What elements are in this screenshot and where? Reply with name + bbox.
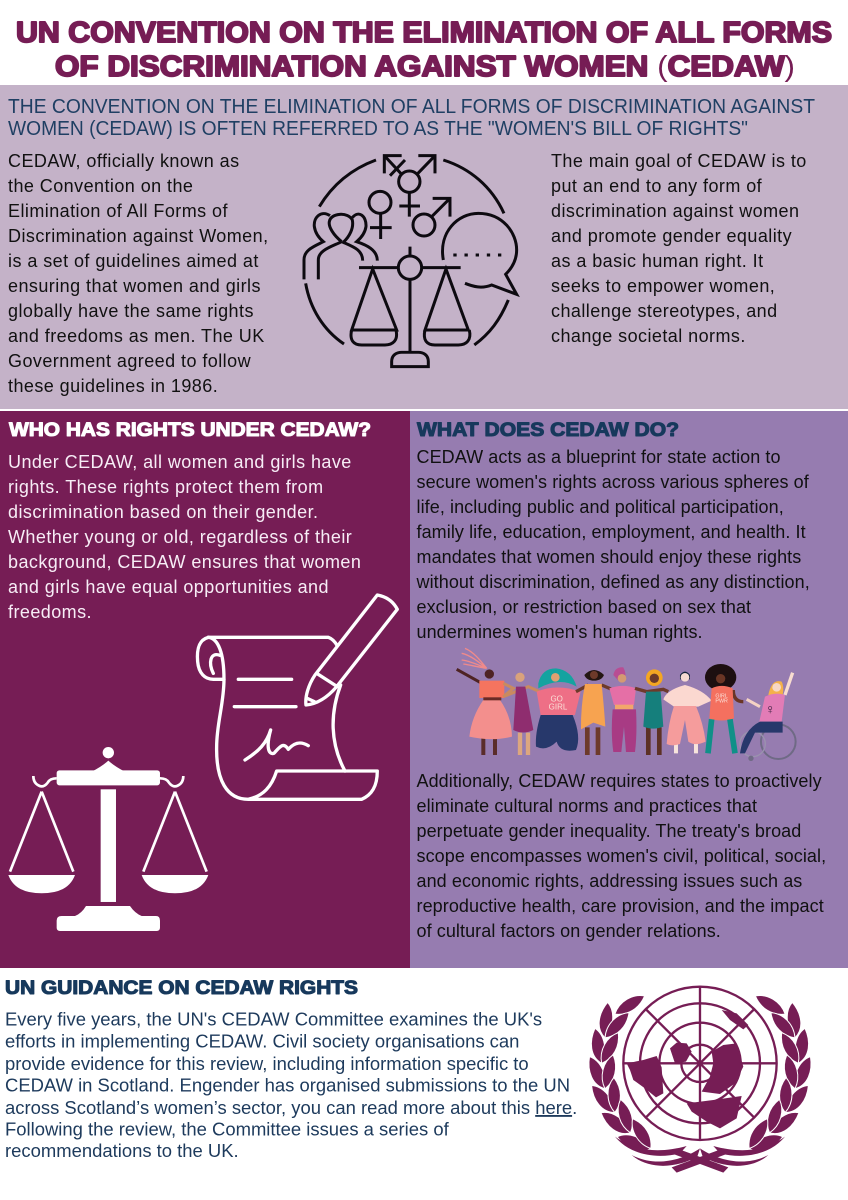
text block: background, CEDAW ensures that women	[8, 552, 361, 572]
panel: what does CEDAW do	[410, 411, 848, 968]
text block: what CEDAW is: is a set of guidelines aimed at	[8, 251, 259, 271]
subheading	[8, 96, 815, 140]
text block: discrimination based on their gender.	[8, 502, 318, 522]
heading: WHAT DOES CEDAW DO?	[417, 419, 679, 441]
illustration: diverse women linking arms: PWR	[715, 698, 728, 704]
text block: across Scotland’s women’s sector, you can read more about this here.	[5, 1097, 577, 1118]
text block: what CEDAW is: Government agreed to follow	[8, 351, 252, 371]
illustration: diverse women linking arms: GIRL	[549, 702, 568, 711]
text block: cultural norms	[416, 771, 826, 941]
text block: blueprint: CEDAW acts as a blueprint for state action to	[416, 447, 781, 467]
text block	[8, 452, 361, 622]
text block: what CEDAW is: these guidelines in 1986.	[8, 376, 218, 396]
text block: what CEDAW is: Elimination of All Forms of	[8, 201, 229, 221]
text block: cultural norms: Additionally, CEDAW requires states to proactively	[416, 771, 822, 791]
text block: provide evidence for this review, including information specific to	[5, 1053, 529, 1074]
text block: blueprint: mandates that women should enjoy these rights	[416, 547, 801, 567]
text block: Under CEDAW, all women and girls have	[8, 452, 352, 472]
text block: recommendations to the UK.	[5, 1140, 239, 1161]
text block: freedoms.	[8, 602, 92, 622]
title: OF DISCRIMINATION AGAINST WOMEN (CEDAW )	[55, 51, 795, 83]
icon: balance scale	[8, 747, 208, 931]
heading: UN GUIDANCE ON CEDAW RIGHTS	[5, 977, 358, 999]
text block: Every five years, the UN's CEDAW Committee examines the UK's	[5, 1009, 542, 1030]
heading: WHO HAS RIGHTS UNDER CEDAW?	[9, 419, 371, 441]
text block: what CEDAW is: the Convention on the	[8, 176, 193, 196]
text block: and girls have equal opportunities and	[8, 577, 329, 597]
text block: blueprint: life, including public and political participation,	[416, 497, 784, 517]
text block: main goal	[551, 151, 807, 346]
panel: UN guidance	[5, 977, 814, 1173]
panel: who has rights	[0, 411, 410, 968]
illustration: diverse women linking arms	[457, 648, 796, 761]
text block: main goal: change societal norms.	[551, 326, 746, 346]
text block: cultural norms: scope encompasses women's civil, political, social,	[416, 846, 826, 866]
text block: blueprint: family life, education, employment, and health. It	[416, 522, 806, 542]
illustration: diverse women linking arms: ♀	[765, 701, 776, 717]
subheading: WOMEN (CEDAW) IS OFTEN REFERRED TO AS THE "WOMEN'S BILL OF RIGHTS"	[8, 118, 748, 140]
text block: main goal: challenge stereotypes, and	[551, 301, 778, 321]
title	[16, 17, 832, 83]
text block: what CEDAW is: ensuring that women and girls	[8, 276, 261, 296]
text block: Following the review, the Committee issues a series of	[5, 1119, 450, 1140]
text block	[5, 1009, 577, 1161]
text block: what CEDAW is: globally have the same rights	[8, 301, 254, 321]
text block: what CEDAW is: Discrimination against Women,	[8, 226, 269, 246]
text block: blueprint	[416, 447, 810, 642]
text block: main goal: and promote gender equality	[551, 226, 792, 246]
text block: blueprint: undermines women's human rights.	[416, 622, 703, 642]
panel: introduction	[0, 85, 848, 409]
text block: cultural norms: eliminate cultural norms and practices that	[416, 796, 757, 816]
text block: what CEDAW is	[8, 151, 269, 396]
text block: rights. These rights protect them from	[8, 477, 324, 497]
text block: cultural norms: and economic rights, addressing issues such as	[416, 871, 802, 891]
title: UN CONVENTION ON THE ELIMINATION OF ALL FORMS	[16, 17, 832, 49]
text block: what CEDAW is: CEDAW, officially known as	[8, 151, 240, 171]
illustration: diverse women linking arms: GO	[550, 695, 563, 704]
text block: main goal: seeks to empower women,	[551, 276, 775, 296]
text block: main goal: The main goal of CEDAW is to	[551, 151, 807, 171]
icon: UN emblem	[586, 987, 814, 1173]
illustration: diverse women linking arms: GIRL	[715, 693, 728, 699]
text block: CEDAW in Scotland. Engender has organised submissions to the UN	[5, 1075, 570, 1096]
text block: main goal: put an end to any form of	[551, 176, 763, 196]
text block: cultural norms: perpetuate gender inequality. The treaty's broad	[416, 821, 801, 841]
text block: blueprint: without discrimination, defined as any distinction,	[416, 572, 810, 592]
text block: efforts in implementing CEDAW. Civil society organisations can	[5, 1031, 519, 1052]
text block: blueprint: secure women's rights across various spheres of	[416, 472, 810, 492]
icon: gender equality and justice	[304, 156, 517, 367]
text block: cultural norms: of cultural factors on gender relations.	[416, 921, 721, 941]
text block: cultural norms: reproductive health, care provision, and the impact	[416, 896, 824, 916]
icon: scroll and pen	[197, 595, 397, 799]
text block: what CEDAW is: and freedoms as men. The UK	[8, 326, 265, 346]
text block: Whether young or old, regardless of their	[8, 527, 352, 547]
subheading: THE CONVENTION ON THE ELIMINATION OF ALL FORMS OF DISCRIMINATION AGAINST	[8, 96, 815, 118]
text block: main goal: discrimination against women	[551, 201, 799, 221]
text block: blueprint: exclusion, or restriction based on sex that	[416, 597, 751, 617]
text block: main goal: as a basic human right. It	[551, 251, 764, 271]
